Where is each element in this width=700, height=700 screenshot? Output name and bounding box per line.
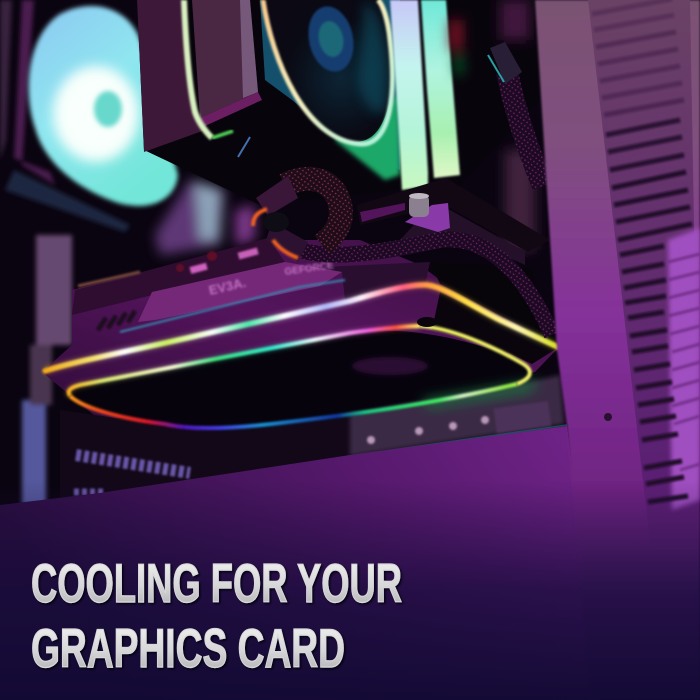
background glow behind card xyxy=(155,180,255,255)
shroud vents xyxy=(98,311,135,330)
vent slats xyxy=(592,0,692,502)
icon: fan hub xyxy=(303,2,359,76)
back of case glow xyxy=(450,0,535,250)
cooler grey face xyxy=(192,0,258,118)
blue fan wall xyxy=(260,0,400,170)
fan disc xyxy=(264,0,392,142)
memory module dots xyxy=(74,455,190,492)
fan shroud black interior xyxy=(68,331,529,427)
lighter patch slats xyxy=(668,254,700,470)
mount nub xyxy=(417,317,437,327)
dark area right of card xyxy=(430,262,558,346)
panel latch xyxy=(604,413,612,421)
PCB pads xyxy=(176,248,259,274)
left case frame xyxy=(0,0,130,505)
bottom case panel xyxy=(0,426,600,700)
LED ring on fan xyxy=(263,0,392,144)
card edge PCB xyxy=(72,238,285,315)
hose loop xyxy=(285,179,341,245)
screw xyxy=(409,193,429,217)
green glow under fan xyxy=(335,95,400,180)
braided cable top right xyxy=(488,42,543,186)
braided cooling hose xyxy=(253,176,552,335)
blue accent line xyxy=(120,280,345,332)
GPU fan hub xyxy=(352,357,428,375)
upper strip xyxy=(45,285,558,371)
dark gradient overlay xyxy=(0,480,700,700)
title line 2: GRAPHICS CARD xyxy=(31,617,345,679)
lower strip top xyxy=(69,326,420,396)
GeForce label: GEFORCE xyxy=(284,260,335,278)
RAM light bars xyxy=(390,0,460,190)
right side panel xyxy=(535,0,700,700)
dark band between strips xyxy=(432,292,556,364)
graphics card body xyxy=(42,238,558,427)
CPU cooler xyxy=(137,0,540,205)
green LED tail xyxy=(212,131,233,138)
title line 1: COOLING FOR YOUR xyxy=(31,552,402,614)
teal edge line xyxy=(110,425,567,495)
fan disc blue tint xyxy=(358,0,388,113)
lighter vent patch xyxy=(668,228,700,510)
board screws xyxy=(367,416,489,444)
dark area under hose xyxy=(300,262,430,300)
connector hub xyxy=(263,212,289,232)
LED strip on cooler xyxy=(184,0,212,138)
hose connector xyxy=(256,176,298,216)
GPU mounting bracket xyxy=(357,178,550,265)
RGB LED strips xyxy=(45,285,558,428)
icon: glowing case fan xyxy=(29,6,178,206)
brand label: EV3A. xyxy=(207,275,247,298)
lower strip right xyxy=(420,326,530,384)
EVGA shroud panel xyxy=(138,262,342,322)
upper strip glow xyxy=(45,285,558,371)
lower strip top glow xyxy=(69,326,420,396)
title xyxy=(31,552,402,679)
side panel vents xyxy=(588,0,700,560)
blue accent xyxy=(238,137,250,157)
board chips xyxy=(493,401,551,433)
orange wires xyxy=(253,209,298,258)
lower strip underside xyxy=(70,384,517,428)
cooler side face xyxy=(137,0,205,152)
motherboard below card xyxy=(60,375,567,500)
